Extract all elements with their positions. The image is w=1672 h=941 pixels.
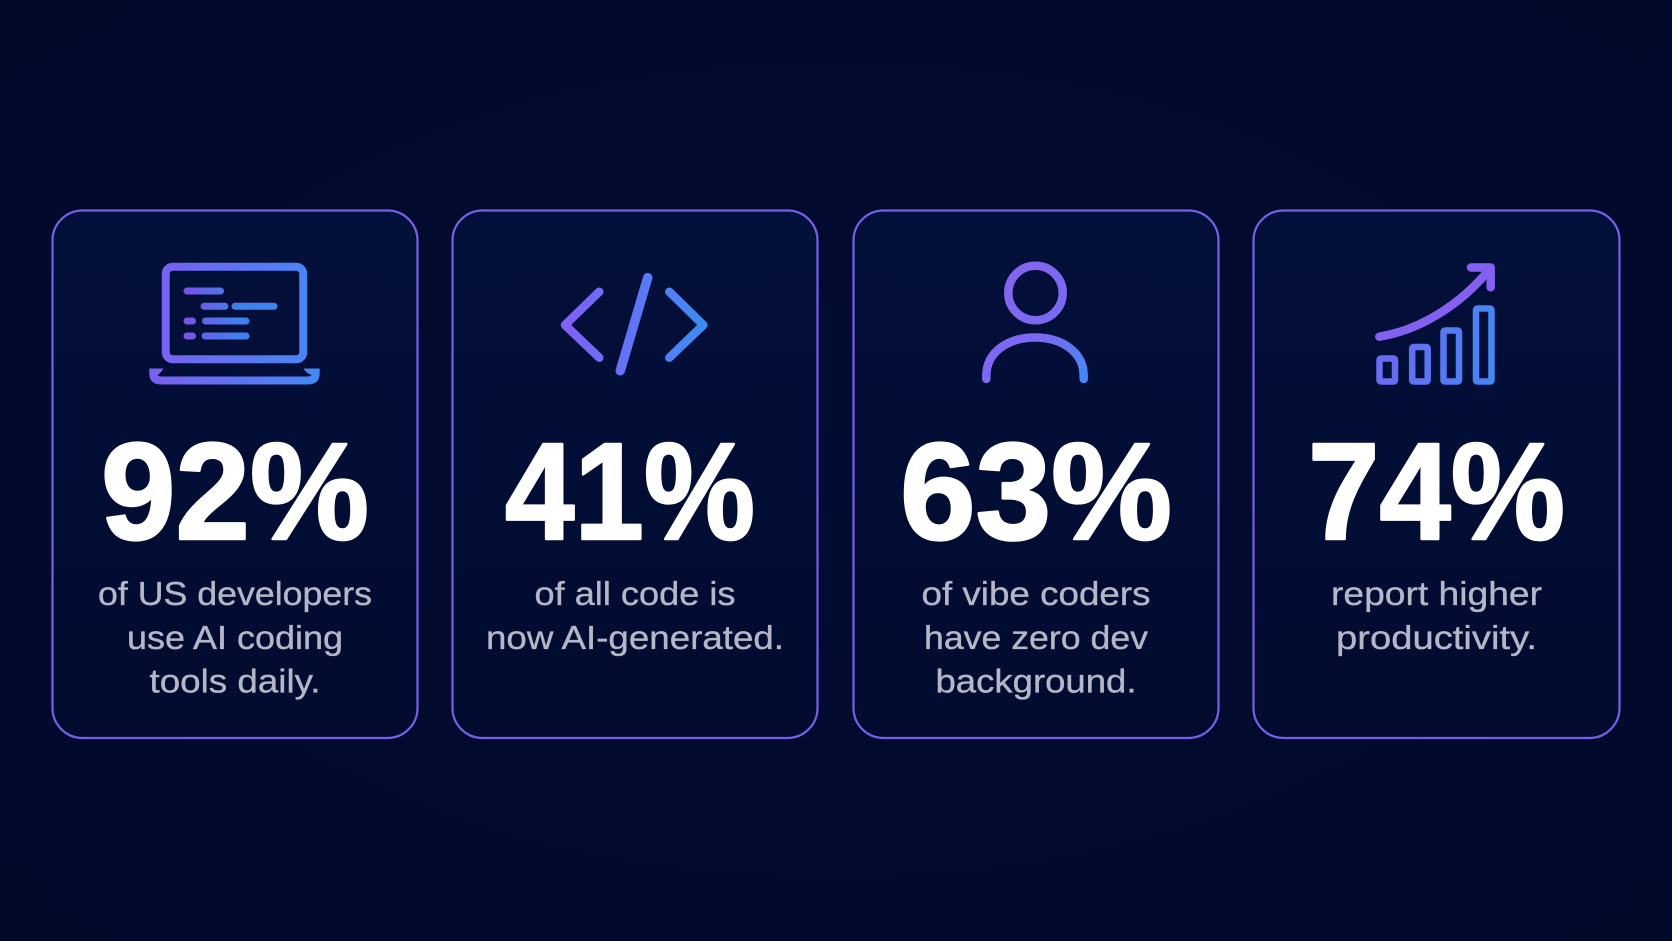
statistic: 74%: 74% [1308,415,1565,569]
description: US developers: use AI coding [127,620,343,657]
panel: 74% report higher productivity [1254,210,1620,738]
description: AI-generated code [486,576,784,657]
description: vibe coders: have zero dev [924,620,1148,657]
description: US developers: of US developers [98,576,372,613]
panel: 41% of all code [452,210,818,738]
statistic: 41%: 41% [505,415,755,569]
description: US developers: tools daily. [150,664,320,700]
statistic: 92%: 92% [101,415,369,569]
description: vibe coders [922,576,1150,700]
panel: 92% of US developers [52,210,418,738]
description: AI-generated code: now AI-generated. [486,620,784,657]
description: vibe coders: background. [936,664,1136,700]
description: vibe coders: of vibe coders [922,576,1150,613]
icon: laptop with code [149,267,320,384]
description: AI-generated code: of all code is [534,576,736,613]
icon: growth chart with arrow [1379,268,1492,382]
description: higher productivity [1331,576,1542,657]
statistic: 63%: 63% [900,415,1172,569]
description: US developers [98,576,372,700]
icon: person [986,266,1084,379]
panel: 63% of vibe coders [854,210,1218,738]
description: higher productivity: report higher [1331,576,1542,613]
description: higher productivity: productivity. [1336,620,1537,657]
icon: code brackets [565,278,703,371]
